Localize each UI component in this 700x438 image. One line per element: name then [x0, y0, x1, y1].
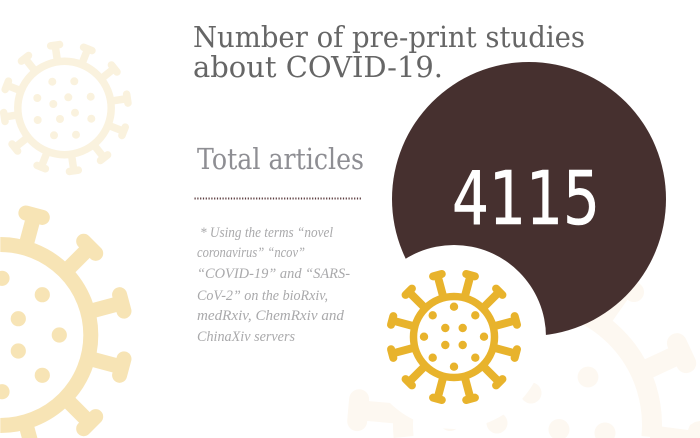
note text: “COVID-19” and “SARS-: [197, 266, 350, 282]
title: about COVID-19.: [193, 50, 443, 84]
icon: pale virus bottom right: [357, 279, 700, 438]
dark circle: [392, 62, 666, 336]
big number: 4115: [452, 156, 600, 242]
title: Number of pre-print studies: [193, 20, 585, 54]
icon: light virus top left: [4, 45, 128, 171]
dotted divider: [194, 198, 362, 200]
note text: ChinaXiv servers: [197, 329, 295, 345]
note text: [197, 225, 350, 345]
note text: medRxiv, ChemRxiv and: [197, 308, 344, 324]
title: [193, 20, 585, 84]
note text: coronavirus” “ncov”: [197, 245, 305, 261]
icon: large virus left: [0, 213, 124, 438]
note text: * Using the terms “novel: [200, 225, 333, 241]
icon: yellow virus: [391, 274, 517, 400]
white circle behind yellow virus: [362, 245, 546, 429]
heading: total articles: Total articles: [197, 142, 364, 176]
note text: CoV-2” on the bioRxiv,: [197, 288, 328, 304]
